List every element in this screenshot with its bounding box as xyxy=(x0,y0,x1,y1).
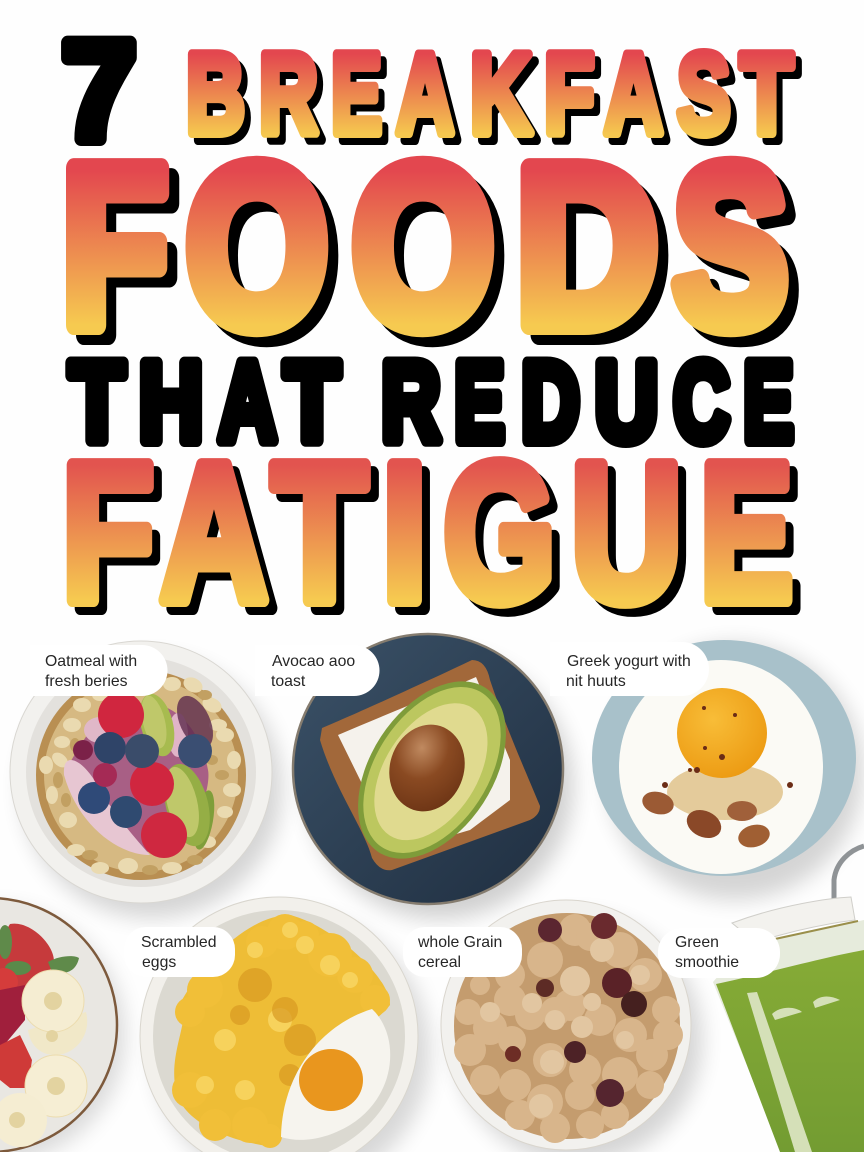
title: FATIGUE: G xyxy=(452,431,564,650)
title: FOODS: D xyxy=(526,130,668,384)
food: oatmeal bowl xyxy=(10,641,282,918)
title: FATIGUE: U xyxy=(571,423,682,642)
title: BREAKFAST: R xyxy=(259,31,318,158)
label: greek yogurt: Greek yogurt with xyxy=(567,653,691,670)
title: FATIGUE: E xyxy=(700,423,793,642)
title: THAT REDUCE: T xyxy=(284,340,340,464)
title: FOODS xyxy=(62,120,798,384)
title: FOODS: S xyxy=(683,130,798,384)
label: whole grain cereal: cereal xyxy=(418,954,461,971)
food: fruit plate xyxy=(0,898,125,1152)
title: FOODS: S xyxy=(673,120,788,374)
title: BREAKFAST: A xyxy=(604,31,663,158)
title: BREAKFAST: T xyxy=(740,31,793,158)
title: FATIGUE: I xyxy=(382,423,427,642)
title: THAT REDUCE: R xyxy=(382,340,440,464)
food: scrambled eggs bowl xyxy=(140,897,430,1152)
title: FOODS: F xyxy=(72,130,178,384)
title: FATIGUE xyxy=(62,423,801,650)
label: green smoothie: Green xyxy=(675,934,719,951)
label: scrambled eggs xyxy=(124,927,235,977)
title: FOODS: O xyxy=(196,130,338,384)
title: FATIGUE: F xyxy=(70,431,162,650)
label: oatmeal xyxy=(30,645,168,696)
title: BREAKFAST: F xyxy=(544,31,594,158)
title: FATIGUE: T xyxy=(280,431,375,650)
title: BREAKFAST: B xyxy=(192,38,251,165)
title: THAT REDUCE: C xyxy=(674,340,730,464)
title: FATIGUE: A xyxy=(168,431,276,650)
title: FATIGUE: A xyxy=(160,423,268,642)
title: FOODS: F xyxy=(62,120,168,374)
title: FOODS: O xyxy=(352,120,494,374)
title: THAT REDUCE: T xyxy=(70,340,124,464)
label: oatmeal: fresh beries xyxy=(45,673,128,690)
title: BREAKFAST: E xyxy=(331,31,382,158)
title: FOODS: O xyxy=(362,130,504,384)
food: avocado toast plate xyxy=(293,634,573,919)
title: FOODS: D xyxy=(516,120,658,374)
title: BREAKFAST: A xyxy=(402,38,460,165)
label: greek yogurt: nit huuts xyxy=(566,673,626,690)
title: FOODS: O xyxy=(186,120,328,374)
title: BREAKFAST: K xyxy=(476,38,538,165)
label: avocado toast xyxy=(255,645,380,696)
title: FATIGUE: F xyxy=(62,423,154,642)
title: BREAKFAST: F xyxy=(550,38,600,165)
title: BREAKFAST: E xyxy=(337,38,388,165)
title: THAT REDUCE: A xyxy=(218,340,276,464)
title: BREAKFAST xyxy=(186,31,799,165)
title: FATIGUE: G xyxy=(444,423,556,642)
label: whole grain cereal: whole Grain xyxy=(417,934,502,951)
title: THAT REDUCE: H xyxy=(139,340,203,464)
label: whole grain cereal xyxy=(403,927,522,977)
label: scrambled eggs: Scrambled xyxy=(141,934,217,951)
title: BREAKFAST: A xyxy=(396,31,454,158)
title: THAT REDUCE: E xyxy=(744,340,794,464)
title: number 7: 7 xyxy=(62,12,136,169)
food: greek yogurt bowl xyxy=(592,640,863,900)
title: THAT REDUCE: U xyxy=(595,340,658,464)
title: BREAKFAST: A xyxy=(610,38,669,165)
label: greek yogurt xyxy=(550,642,709,696)
title: BREAKFAST: K xyxy=(470,31,532,158)
title: THAT REDUCE: E xyxy=(454,340,504,464)
title: FATIGUE: E xyxy=(708,431,801,650)
title: BREAKFAST: B xyxy=(186,31,245,158)
label: avocado toast: Avocao aoo xyxy=(272,653,355,670)
label: green smoothie xyxy=(658,928,780,978)
title: FATIGUE: T xyxy=(272,423,367,642)
food: whole grain cereal bowl xyxy=(441,900,702,1152)
title: BREAKFAST: T xyxy=(746,38,799,165)
title: BREAKFAST: S xyxy=(683,38,736,165)
label: scrambled eggs: eggs xyxy=(142,954,176,971)
label: green smoothie: smoothie xyxy=(675,954,739,971)
label: oatmeal: Oatmeal with xyxy=(45,653,137,670)
label: avocado toast: toast xyxy=(271,673,306,690)
title: FATIGUE: I xyxy=(390,431,435,650)
title: BREAKFAST: R xyxy=(265,38,324,165)
title xyxy=(62,12,801,650)
food: green smoothie jar xyxy=(713,846,864,1152)
title: THAT REDUCE: D xyxy=(522,340,580,464)
title: BREAKFAST: S xyxy=(677,31,730,158)
title: FATIGUE: U xyxy=(579,431,690,650)
